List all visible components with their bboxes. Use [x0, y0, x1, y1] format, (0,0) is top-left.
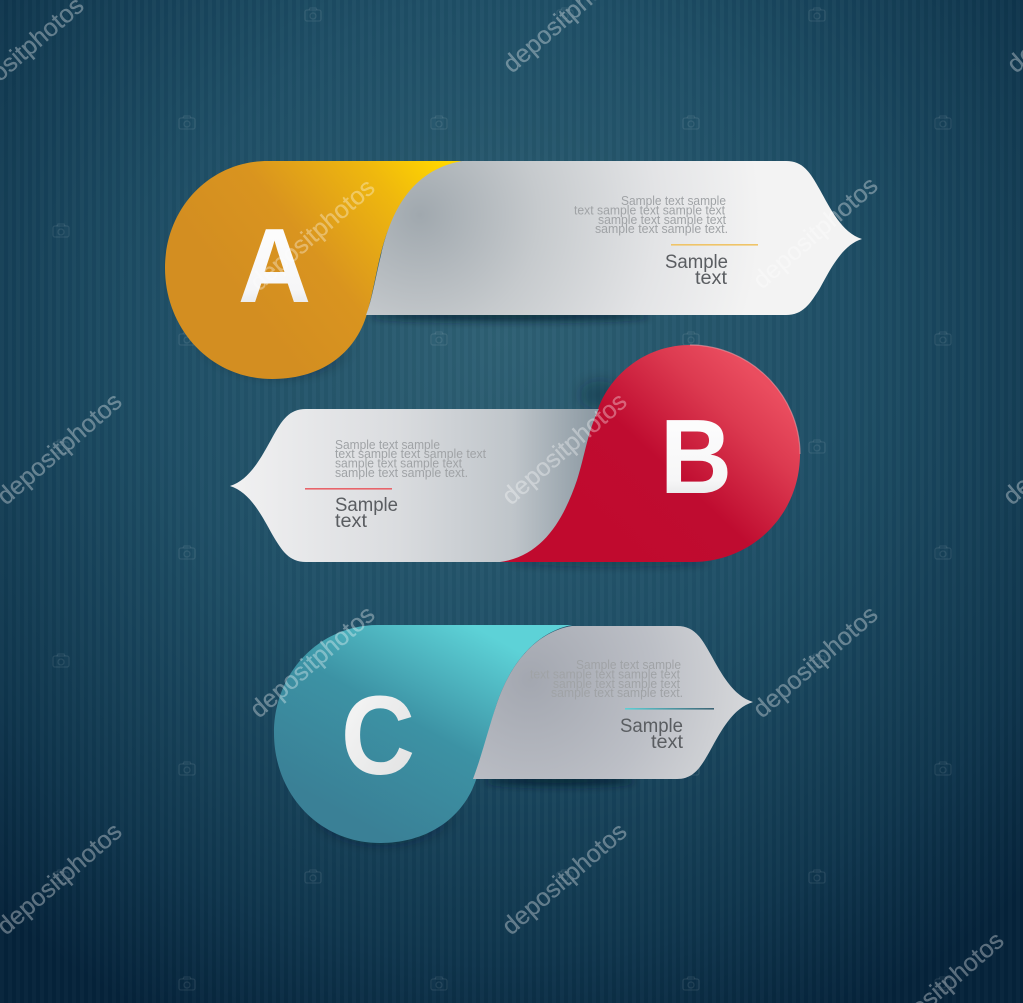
label B: [335, 495, 398, 532]
shadow B: [510, 381, 710, 567]
watermark text: depositphotos: [245, 600, 380, 724]
body text A: sample text sample text: [598, 213, 727, 227]
watermark text: depositphotos: [497, 387, 632, 511]
body text C: Sample text sample: [576, 658, 681, 672]
label A: text: [695, 268, 728, 289]
body text B: text sample text sample text: [335, 447, 487, 461]
letter A: A: [238, 207, 311, 325]
shadow C: [310, 776, 635, 841]
letter C: C: [341, 673, 415, 798]
body text C: sample text sample text: [553, 677, 681, 691]
body text A: sample text sample text.: [595, 222, 728, 236]
label B: Sample: [335, 495, 398, 516]
tab B rim highlight: [690, 345, 800, 454]
shadow A: [200, 311, 650, 373]
body text C: sample text sample text.: [551, 686, 683, 700]
watermark text: depositphotos: [497, 817, 632, 941]
body text A: Sample text sample: [621, 194, 726, 208]
body text B: [335, 438, 487, 480]
label C: [620, 716, 684, 753]
panel: B: [230, 345, 800, 567]
body text B: sample text sample text.: [335, 466, 468, 480]
strip C white: [473, 626, 753, 779]
body text B: Sample text sample: [335, 438, 440, 452]
watermark text: depositphotos: [748, 600, 883, 724]
strip A white: [366, 161, 862, 315]
body text C: text sample text sample text: [530, 668, 680, 682]
divider A: [671, 244, 758, 246]
watermark text: depositphotos: [245, 173, 380, 297]
label A: [665, 252, 728, 289]
label A: Sample: [665, 252, 728, 273]
body text A: text sample text sample text: [574, 204, 726, 218]
label B: text: [335, 511, 368, 532]
panel: C: [274, 625, 753, 843]
label C: Sample: [620, 716, 683, 737]
strip B white: [230, 409, 599, 562]
body text B: sample text sample text: [335, 456, 463, 470]
divider C: [625, 708, 714, 710]
panel: A: [165, 161, 862, 379]
letter B: B: [660, 398, 732, 516]
tab A colour: [165, 161, 462, 379]
divider B: [305, 488, 392, 490]
watermark text: depositphotos: [748, 171, 883, 295]
body text A: [574, 194, 728, 236]
body text C: [530, 658, 683, 700]
label C: text: [651, 732, 684, 753]
tab B colour: [495, 345, 800, 562]
tab C colour: [274, 625, 572, 843]
